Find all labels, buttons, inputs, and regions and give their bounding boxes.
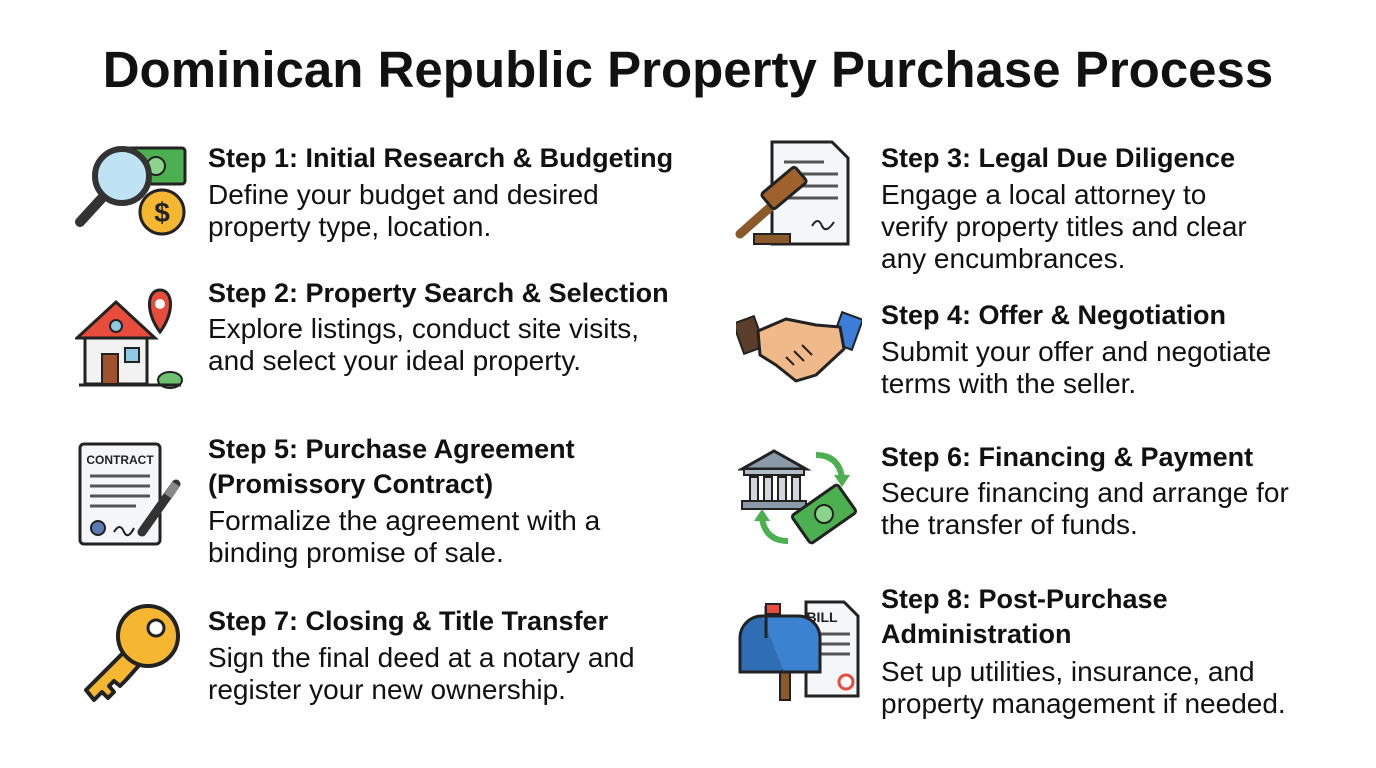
- step 3 icon: gavel and document: [736, 140, 850, 246]
- step 4 text: terms with the seller.: [881, 368, 1136, 399]
- step 2 text: [208, 313, 639, 376]
- step 5 text: binding promise of sale.: [208, 537, 504, 568]
- step 8 heading: Administration: [881, 619, 1072, 649]
- step 8 text: property management if needed.: [881, 688, 1286, 719]
- step 7 heading: Step 7: Closing & Title Transfer: [208, 606, 608, 636]
- step 6 icon: bank and money: [738, 449, 857, 544]
- step 3 text: [881, 179, 1247, 274]
- step 5 icon: contract: [78, 442, 180, 546]
- step 8 text: [881, 656, 1286, 719]
- step 5 icon: contract: CONTRACT: [86, 453, 154, 467]
- step 1 text: property type, location.: [208, 211, 491, 242]
- step 4 icon: handshake: [736, 310, 862, 382]
- step 6 text: [881, 477, 1289, 540]
- step 1 text: Define your budget and desired: [208, 179, 599, 210]
- step 3 text: verify property titles and clear: [881, 211, 1247, 242]
- step 1 heading: Step 1: Initial Research & Budgeting: [208, 143, 673, 173]
- step 8 icon: mailbox and bill: [738, 600, 860, 701]
- step 8 heading: Step 8: Post-Purchase: [881, 584, 1168, 614]
- step 5 text: Formalize the agreement with a: [208, 505, 600, 536]
- step 7 text: register your new ownership.: [208, 674, 566, 705]
- step 7 text: Sign the final deed at a notary and: [208, 642, 635, 673]
- step 5 heading: [208, 434, 575, 499]
- step 1 icon: magnifier and money: [75, 146, 186, 236]
- step 8 text: Set up utilities, insurance, and: [881, 656, 1255, 687]
- step 2 icon: house with pin: [75, 288, 183, 389]
- step 8 icon: mailbox and bill: BILL: [806, 609, 838, 625]
- step 2 text: Explore listings, conduct site visits,: [208, 313, 639, 344]
- step 8 heading: [881, 584, 1168, 649]
- step 5 text: [208, 505, 600, 568]
- step 7 text: [208, 642, 635, 705]
- step 4 text: Submit your offer and negotiate: [881, 336, 1271, 367]
- step 4 heading: Step 4: Offer & Negotiation: [881, 300, 1226, 330]
- step 5 heading: Step 5: Purchase Agreement: [208, 434, 575, 464]
- title: Dominican Republic Property Purchase Process: [103, 41, 1273, 98]
- step 2 text: and select your ideal property.: [208, 345, 581, 376]
- step 1 text: [208, 179, 599, 242]
- step 1 icon: magnifier and money: $: [154, 197, 170, 228]
- step 4 text: [881, 336, 1271, 399]
- step 7 icon: key: [84, 604, 180, 702]
- step 2 heading: Step 2: Property Search & Selection: [208, 278, 669, 308]
- step 3 heading: Step 3: Legal Due Diligence: [881, 143, 1235, 173]
- step 3 text: any encumbrances.: [881, 243, 1125, 274]
- step 3 text: Engage a local attorney to: [881, 179, 1206, 210]
- step 6 heading: Step 6: Financing & Payment: [881, 442, 1253, 472]
- step 5 heading: (Promissory Contract): [208, 469, 493, 499]
- step 6 text: the transfer of funds.: [881, 509, 1138, 540]
- step 6 text: Secure financing and arrange for: [881, 477, 1289, 508]
